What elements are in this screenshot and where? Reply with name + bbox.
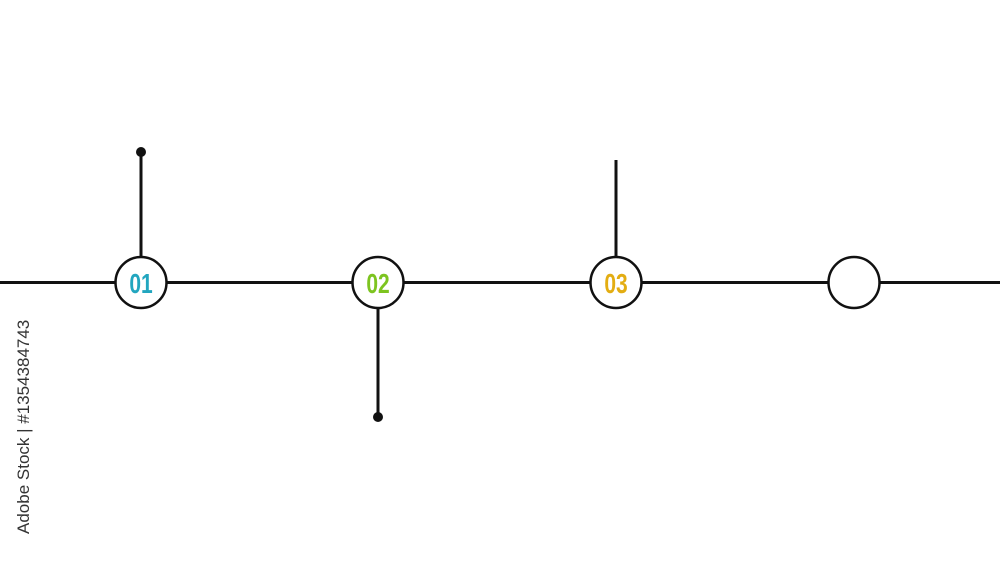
node 03: 03	[604, 269, 628, 300]
node 03	[590, 257, 642, 308]
node 02: 02	[366, 269, 390, 300]
timeline axis	[0, 281, 1000, 284]
node 01: 01	[129, 269, 153, 300]
node 02	[352, 257, 404, 308]
node 04 empty	[828, 257, 880, 308]
watermark text vertical: Adobe Stock | #1354384743	[14, 320, 33, 534]
stem 3	[614, 160, 618, 256]
stem 1 with dot	[136, 147, 146, 256]
node 01	[116, 257, 166, 308]
stem 2 with dot	[373, 308, 383, 422]
